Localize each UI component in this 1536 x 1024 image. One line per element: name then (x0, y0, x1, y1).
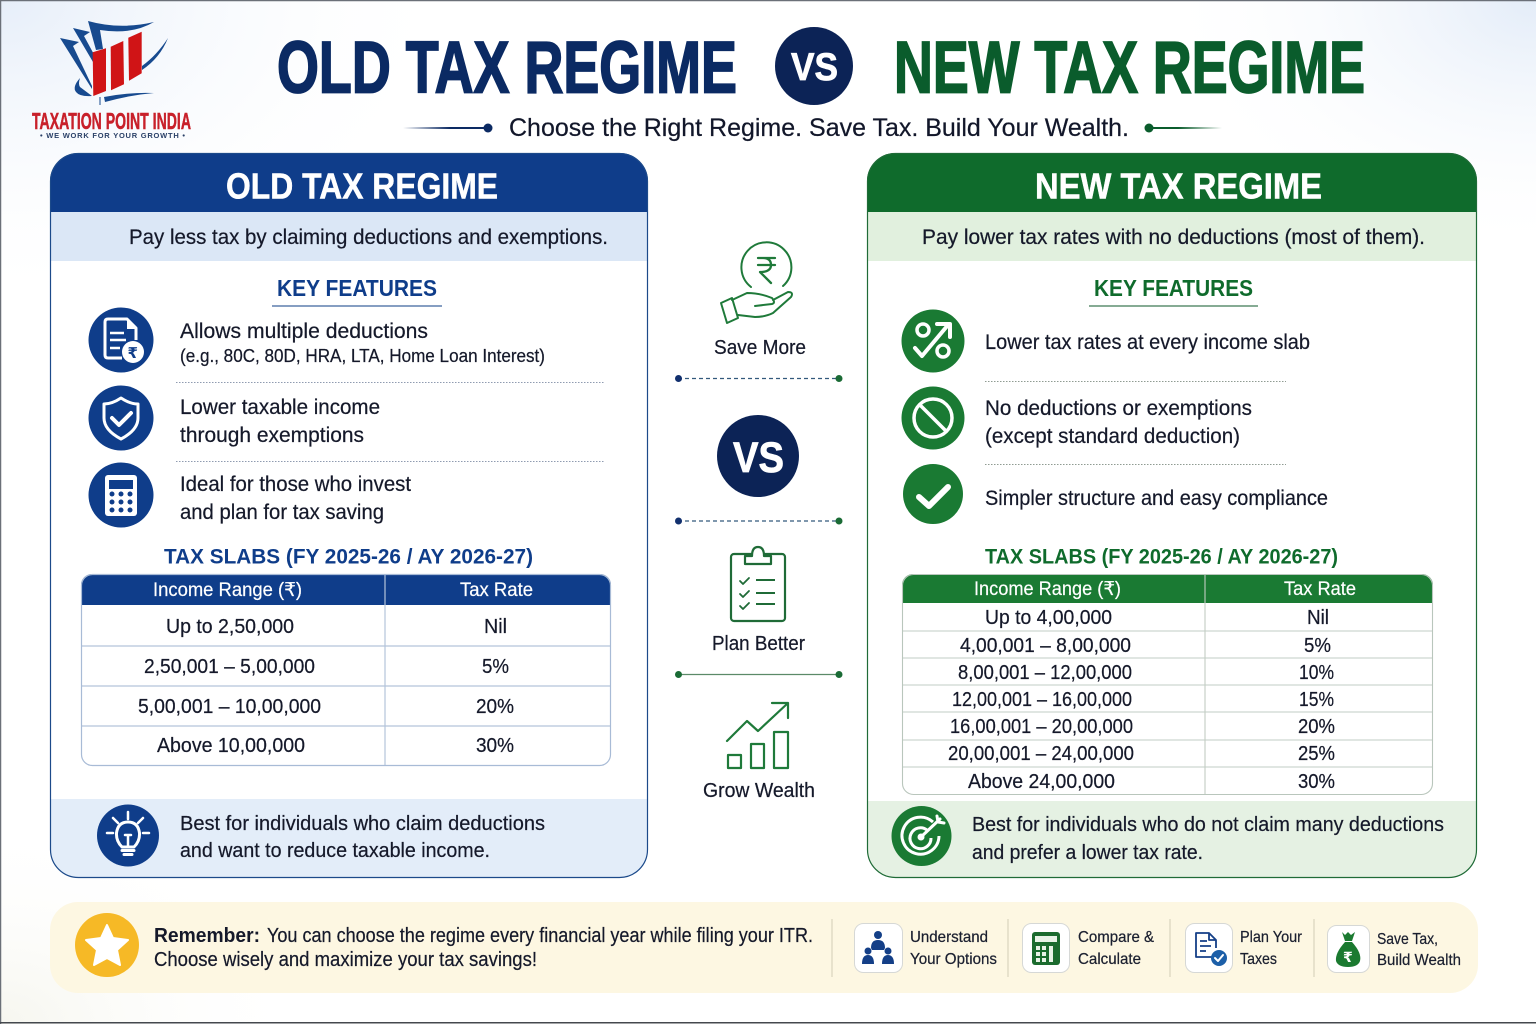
table: old regime slabs: Up to 2,50,000 (166, 616, 294, 638)
table: new regime slabs (902, 574, 1433, 795)
step: compare and calculate: Calculate (1078, 951, 1141, 968)
table: old regime slabs: 2,50,001 – 5,00,000 (144, 656, 315, 678)
feature: simpler structure: Simpler structure and easy compliance (985, 487, 1328, 510)
feature: lower tax rates: Lower tax rates at every income slab (985, 331, 1310, 354)
icon: star badge (75, 913, 139, 977)
best-for callout: new regime: Best for individuals who do not claim many deductions (972, 813, 1444, 836)
feature: simpler structure (903, 464, 1328, 524)
icon: light bulb (97, 804, 159, 866)
title: new tax regime: NEW TAX REGIME (894, 28, 1365, 108)
icon: percent with arrow (902, 310, 964, 372)
step: understand options (854, 924, 997, 972)
VS badge in title (775, 27, 853, 105)
footer banner: remember (50, 902, 1478, 993)
step: plan your taxes: Taxes (1240, 951, 1277, 968)
title: old tax regime: OLD TAX REGIME (277, 28, 737, 108)
remember message: Remember: (154, 925, 260, 947)
table: new regime slabs: 10% (1299, 662, 1334, 684)
feature: lower taxable income: Lower taxable income (180, 396, 380, 419)
step: compare and calculate (1022, 924, 1154, 972)
panel heading: NEW TAX REGIME (1035, 166, 1322, 206)
step: save tax build wealth: Save Tax, (1377, 931, 1438, 948)
feature: ideal for investors: and plan for tax saving (180, 501, 384, 524)
benefit: save more (714, 242, 806, 359)
subtitle with decorative ends: Choose the Right Regime. Save Tax. Build Your Wealth. (509, 114, 1129, 142)
icon: target with arrow (892, 806, 952, 866)
feature: no deductions: (except standard deduction) (985, 425, 1240, 448)
step: compare and calculate: Compare & (1078, 929, 1154, 946)
step: understand options: Understand (910, 929, 988, 946)
logo name: TAXATION POINT INDIA (32, 108, 191, 134)
benefit: grow wealth (703, 703, 815, 802)
best-for callout: new regime (892, 806, 1444, 866)
table: new regime slabs: Nil (1307, 607, 1329, 629)
step: plan your taxes (1186, 924, 1303, 972)
panel summary: Pay lower tax rates with no deductions (most of them). (922, 226, 1425, 249)
icon: document with rupee: ₹ (128, 344, 138, 362)
logo mark: swooshes and red bars (60, 21, 168, 105)
table: old regime slabs: Above 10,00,000 (157, 735, 305, 757)
table: new regime slabs: Tax Rate (1284, 579, 1356, 600)
table: new regime slabs: Above 24,00,000 (968, 771, 1115, 793)
VS badge in title: VS (791, 46, 838, 89)
table: new regime slabs: 4,00,001 – 8,00,000 (960, 635, 1131, 657)
panel: old tax regime (50, 153, 648, 878)
table: new regime slabs: 20,00,001 – 24,00,000 (948, 743, 1134, 765)
key features heading: KEY FEATURES (1094, 275, 1253, 301)
icon: document with check (1186, 924, 1232, 972)
step: plan your taxes: Plan Your (1240, 929, 1303, 946)
tax slabs heading: TAX SLABS (FY 2025-26 / AY 2026-27) (164, 546, 533, 568)
best-for callout: old regime: Best for individuals who claim deductions (180, 812, 545, 835)
logo tagline: • WE WORK FOR YOUR GROWTH • (40, 131, 185, 140)
icon: checklist clipboard (731, 547, 785, 621)
feature: multiple deductions (88, 308, 545, 372)
feature: lower taxable income: through exemptions (180, 424, 364, 447)
feature: multiple deductions: (e.g., 80C, 80D, HRA, LTA, Home Loan Interest) (180, 346, 545, 366)
icon: calculator (88, 462, 154, 528)
table: old regime slabs: 20% (476, 696, 514, 718)
benefit: grow wealth: Grow Wealth (703, 780, 815, 802)
panel summary: Pay less tax by claiming deductions and exemptions. (129, 226, 608, 249)
table: new regime slabs: 12,00,001 – 16,00,000 (952, 689, 1132, 711)
table: old regime slabs: 30% (476, 735, 514, 757)
benefit: plan better: Plan Better (712, 633, 805, 655)
icon: growth chart (727, 703, 788, 768)
key features heading: KEY FEATURES (277, 275, 437, 301)
table: old regime slabs (81, 574, 611, 766)
step: save tax build wealth: Build Wealth (1377, 952, 1461, 969)
feature: ideal for investors (88, 462, 411, 528)
table: old regime slabs: 5% (482, 656, 509, 678)
VS badge center: VS (733, 434, 784, 482)
table: old regime slabs: Tax Rate (460, 580, 533, 601)
table: new regime slabs: 8,00,001 – 12,00,000 (958, 662, 1132, 684)
step: understand options: Your Options (910, 951, 997, 968)
icon: green calculator (1022, 924, 1070, 972)
feature: no deductions (902, 386, 1252, 450)
table: new regime slabs: Up to 4,00,000 (985, 607, 1112, 629)
feature: lower taxable income (88, 386, 380, 450)
feature: ideal for investors: Ideal for those who invest (180, 473, 411, 496)
feature: lower tax rates (902, 310, 1310, 372)
table: new regime slabs: 30% (1298, 771, 1335, 793)
icon: check mark (903, 464, 963, 524)
table: new regime slabs: 25% (1298, 743, 1335, 765)
icon: prohibited sign (902, 386, 964, 450)
icon: people hierarchy (854, 924, 902, 972)
table: new regime slabs: 20% (1298, 716, 1335, 738)
center column: benefits (675, 242, 842, 802)
icon: money bag: ₹ (1343, 950, 1353, 966)
feature: no deductions: No deductions or exemptions (985, 397, 1252, 420)
icon: hand holding rupee coin (721, 242, 792, 323)
remember message (154, 925, 813, 971)
VS badge center (717, 415, 799, 497)
tax slabs heading: TAX SLABS (FY 2025-26 / AY 2026-27) (985, 546, 1338, 568)
table: new regime slabs: 16,00,001 – 20,00,000 (950, 716, 1133, 738)
table: new regime slabs: Income Range (₹) (974, 579, 1121, 600)
table: old regime slabs: Income Range (₹) (153, 580, 302, 601)
remember message: You can choose the regime every financial year while filing your ITR. (267, 925, 813, 947)
icon: shield with check (88, 386, 154, 450)
table: old regime slabs: Nil (484, 616, 507, 638)
logo: Taxation Point India (32, 21, 191, 140)
benefit: save more: Save More (714, 337, 806, 359)
remember message: Choose wisely and maximize your tax savings! (154, 949, 537, 971)
panel heading: OLD TAX REGIME (226, 166, 498, 206)
icon: document with rupee (88, 308, 154, 372)
table: new regime slabs: 15% (1299, 689, 1334, 711)
step: save tax build wealth (1328, 926, 1461, 972)
best-for callout: old regime (97, 804, 545, 866)
best-for callout: new regime: and prefer a lower tax rate. (972, 841, 1203, 864)
best-for callout: old regime: and want to reduce taxable income. (180, 839, 490, 862)
panel: new tax regime (867, 153, 1477, 878)
feature: multiple deductions: Allows multiple deductions (180, 320, 428, 343)
benefit: plan better (712, 547, 805, 655)
table: old regime slabs: 5,00,001 – 10,00,000 (138, 696, 321, 718)
table: new regime slabs: 5% (1304, 635, 1331, 657)
